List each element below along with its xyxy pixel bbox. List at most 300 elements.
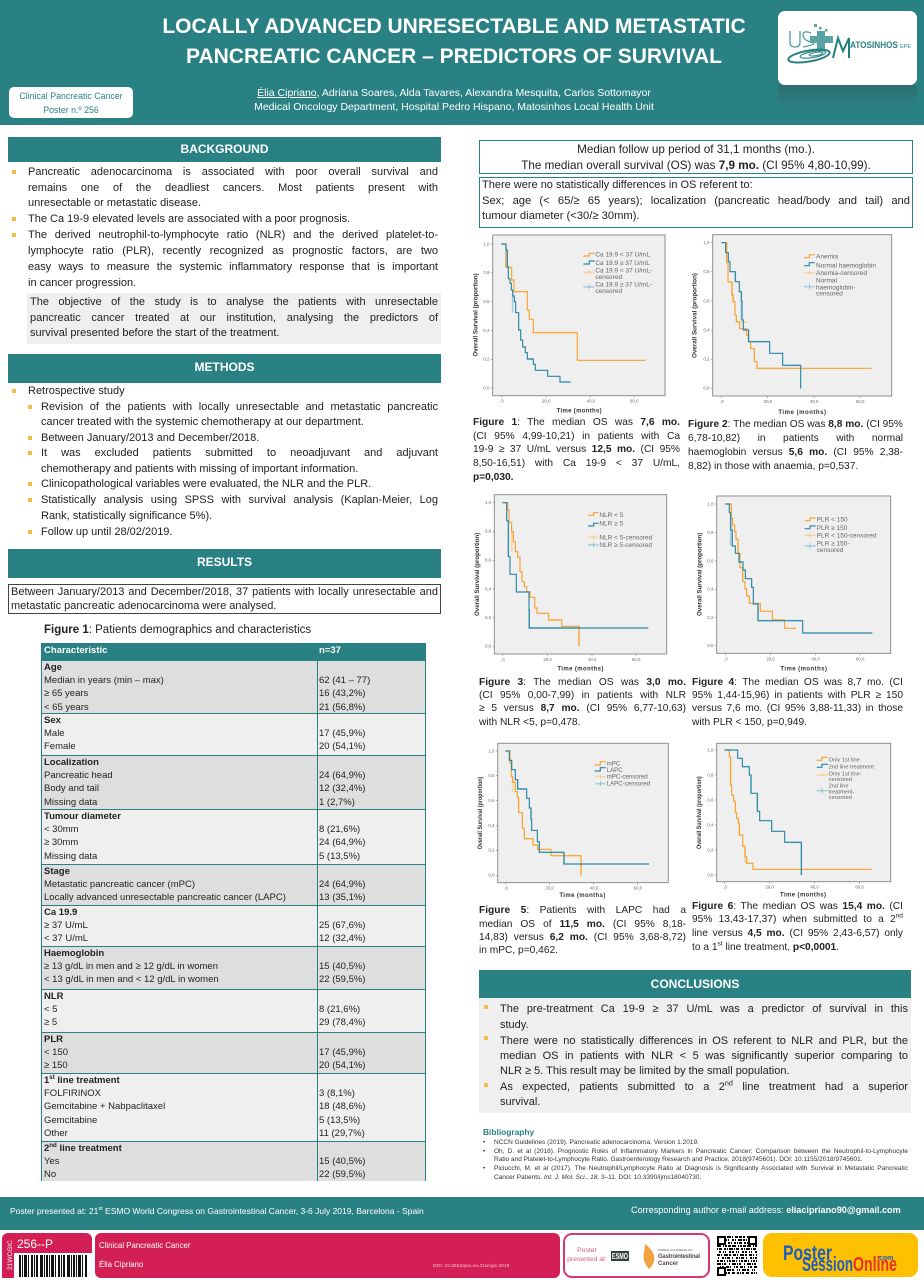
logo: ULS Matosinhos: ATOSINHOS — [850, 40, 898, 51]
axis ticks and labels: 1,0 — [707, 501, 714, 506]
legend: NLR < 5 — [599, 512, 624, 519]
legend: NLR ≥ 5 — [599, 520, 624, 527]
poster info bar: Clinical Pancreatic Cancer — [99, 1241, 190, 1250]
bibliography: Cancer Patients. Int. J. Mol. Sci., 18, 3–11. DOI: 10.3390/ijms18040730. — [494, 1174, 701, 1181]
table: patient characteristics: 24 (64,9%) — [319, 837, 365, 848]
authors and affiliation: Medical Oncology Department, Hospital Pedro Hispano, Matosinhos Local Health Unit — [254, 101, 654, 113]
table: patient characteristics: 5 (13,5%) — [319, 1115, 360, 1126]
legend: Normal — [816, 278, 838, 285]
axis ticks and labels: 20,0 — [765, 884, 774, 889]
axis ticks and labels: Time (months) — [780, 893, 826, 899]
table: patient characteristics: < 13 g/dL in men and < 12 g/dL in women — [44, 974, 219, 985]
heading: methods — [8, 354, 441, 383]
axis ticks and labels: 60,0 — [634, 885, 643, 890]
axis ticks and labels: 1,0 — [488, 748, 495, 753]
panel: background: easy ways to measure the systemic inflammatory response that is important — [28, 260, 438, 272]
poster info bar: DOI: 10.3252/pso.eu.21wcgic.2019 — [433, 1264, 509, 1269]
table: patient characteristics: 21 (56,8%) — [319, 702, 365, 713]
panel: methods: Revision of the patients with locally unresectable and metastatic pancreatic — [41, 400, 438, 412]
axis ticks and labels: 0,4 — [483, 328, 490, 333]
table: patient characteristics: 22 (59,5%) — [319, 974, 365, 985]
table: patient characteristics: 8 (21,6%) — [319, 1004, 360, 1015]
axis ticks and labels: 0,0 — [703, 386, 710, 391]
survival curves — [721, 243, 872, 388]
legend: censored — [829, 777, 852, 783]
table: patient characteristics: 62 (41 – 77) — [319, 675, 370, 686]
axis ticks and labels: Overall Survival (proportion) — [474, 273, 480, 357]
axis ticks and labels: 0,8 — [703, 269, 710, 274]
caption: figure 6: to a 1st line treatment, p<0,0001. — [692, 941, 839, 953]
table: patient characteristics: 12 (32,4%) — [319, 783, 365, 794]
caption: figure 3 — [479, 677, 686, 728]
objective callout: pancreatic cancer treated at our institution, analysing the predictors of — [30, 312, 438, 324]
axis ticks and labels: 0,8 — [483, 270, 490, 275]
results summary: Between January/2013 and December/2018, 37 patients with locally unresectable and — [11, 586, 438, 598]
no differences box: Sex; age (< 65/≥ 65 years); localization (pancreatic head/body and tail) and — [482, 195, 910, 207]
bibliography: • — [483, 1148, 485, 1155]
caption: figure 3: ≥ 5 versus 8,7 mo. (CI 95% 6,77-10,63) — [479, 703, 686, 714]
panel: methods: Statistically analysis using SPSS with survival analysis (Kaplan-Meier, Log — [41, 494, 438, 506]
caption: figure 4: versus 7,6 mo. (CI 95% 3,88-11,33) in those — [692, 703, 903, 714]
legend: LAPC — [607, 767, 623, 774]
table: patient characteristics: Metastatic pancreatic cancer (mPC) — [44, 879, 195, 890]
axis ticks and labels — [474, 241, 639, 414]
legend: 2nd line — [829, 784, 848, 790]
chart: figure 4 PLR — [697, 496, 892, 672]
caption: figure 1: p=0,030. — [473, 472, 514, 483]
legend: Only 1st line- — [829, 771, 862, 777]
legend: mPC — [607, 760, 621, 767]
table: patient characteristics: Other — [44, 1128, 68, 1139]
legend: PLR ≥ 150 — [817, 525, 848, 532]
table: patient characteristics: Median in years (min – max) — [44, 675, 164, 686]
bibliography: Piciucchi, M. et al (2017). The Neutrophil/Lymphocyte Ratio at Diagnosis is Significantly Associated with Survival in Metastatic Pancreatic — [494, 1165, 908, 1172]
panel: conclusions: median OS in patients with NLR < 5 was significantly superior comparing to — [500, 1050, 908, 1062]
results summary: metastatic pancreatic adenocarcinoma were analysed. — [11, 600, 276, 612]
table: patient characteristics: ≥ 37 U/mL — [44, 920, 88, 931]
panel: methods — [8, 354, 441, 538]
logo: ULS Matosinhos: EPE — [900, 44, 911, 50]
heading: methods: METHODS — [194, 360, 254, 374]
table: patient characteristics: 29 (78,4%) — [319, 1017, 365, 1028]
congress note: Poster presented at: 21st ESMO World Congress on Gastrointestinal Cancer, 3-6 July 2019, Barcelona - Spain — [10, 1206, 424, 1216]
legend: Only 1st line — [829, 758, 860, 764]
axis ticks and labels: 20,0 — [764, 399, 773, 404]
legend: censored — [595, 288, 622, 295]
legend: PLR < 150 — [817, 516, 848, 523]
panel: conclusions: NLR ≥ 5. This result may be limited by the small population. — [500, 1064, 790, 1076]
legend: Anemia-censored — [816, 270, 867, 277]
table: patient characteristics: Characteristic — [44, 645, 107, 656]
table: patient characteristics: Locally advanced unresectable pancreatic cancer (LAPC) — [44, 892, 286, 903]
table: patient characteristics: Pancreatic head — [44, 770, 113, 781]
table: patient characteristics: Missing data — [44, 797, 97, 808]
table: patient characteristics: 11 (29,7%) — [319, 1128, 365, 1139]
axis ticks and labels: 1,0 — [483, 241, 490, 246]
axis ticks and labels: 60,0 — [856, 399, 865, 404]
panel: conclusions: study. — [500, 1018, 529, 1030]
table: patient characteristics: Gemcitabine + Nabpaclitaxel — [44, 1101, 165, 1112]
axis ticks and labels: 0,6 — [703, 298, 710, 303]
table: patient characteristics: 1st line treatment — [44, 1074, 120, 1086]
legend: censored — [829, 795, 852, 801]
axis ticks and labels: 40,0 — [590, 885, 599, 890]
legend — [583, 252, 652, 295]
legend: Ca 19.9 < 37 U/mL — [595, 252, 650, 259]
congress logo box: ESMO — [612, 1252, 628, 1261]
poster badge: Poster n.º 256 — [43, 105, 99, 115]
caption: figure 5: median OS of 11,5 mo. (CI 95% 8,18- — [479, 919, 686, 930]
bibliography: Bibliography — [483, 1127, 534, 1137]
axis ticks and labels: 20,0 — [545, 885, 554, 890]
table: patient characteristics: Body and tail — [44, 783, 99, 794]
caption: figure 6 — [692, 901, 903, 953]
axis ticks and labels: 0,2 — [707, 847, 714, 852]
caption: figure 2: 8,82) in those with anaemia, p=0,537. — [688, 461, 858, 472]
caption: figure 2: Figure 2: The median OS was 8,8 mo. (CI 95% — [688, 419, 903, 430]
axis ticks and labels: Overall Survival (proportion) — [693, 273, 699, 358]
axis ticks and labels: Overall Survival (proportion) — [697, 776, 703, 849]
panel: methods: chemotherapy and patients with missing of important information. — [41, 462, 358, 474]
congress logo box — [563, 1233, 710, 1278]
table: patient characteristics: Yes — [44, 1156, 60, 1167]
axis ticks and labels: 20,0 — [543, 657, 552, 662]
caption: figure 4 — [692, 677, 903, 728]
table: patient characteristics: 24 (64,9%) — [319, 770, 365, 781]
caption: figure 3: with NLR <5, p=0,478. — [479, 717, 580, 728]
axis ticks and labels: ,0 — [723, 884, 728, 889]
legend: PLR < 150-censored — [817, 533, 877, 540]
legend — [595, 760, 651, 788]
panel: background — [8, 137, 441, 344]
follow-up summary box — [479, 140, 913, 174]
axis ticks and labels — [697, 747, 864, 899]
legend: NLR < 5-censored — [599, 534, 653, 541]
poster id with barcode: 256--P — [17, 1237, 53, 1251]
table: patient characteristics: Male — [44, 728, 65, 739]
table: patient characteristics: 8 (21,6%) — [319, 824, 360, 835]
axis ticks and labels: Overall Survival (proportion) — [478, 777, 484, 849]
table: patient characteristics: 5 (13,5%) — [319, 851, 360, 862]
legend: 2nd line treatment — [829, 765, 874, 771]
objective callout: The objective of the study is to analyse the patients with unresectable — [30, 296, 438, 308]
congress logo box: Gastrointestinal — [658, 1254, 700, 1260]
axis ticks and labels: 60,0 — [630, 399, 639, 404]
bibliography: NCCN Guidelines (2019). Pancreatic adenocarcinoma. Version 1.2019. — [494, 1139, 699, 1146]
table: patient characteristics: n=37 — [319, 645, 341, 656]
axis ticks and labels: 0,4 — [707, 822, 714, 827]
logo: ULS Matosinhos — [778, 11, 917, 85]
caption: figure 4: 95% 1,44-15,96) in patients with PLR ≥ 150 — [692, 690, 903, 701]
axis ticks and labels: Overall Survival (proportion) — [697, 533, 703, 616]
axis ticks and labels: Time (months) — [557, 408, 602, 414]
panel: methods: Clinicopathological variables were evaluated, the NLR and the PLR. — [41, 478, 371, 490]
table: patient characteristics: Gemcitabine — [44, 1115, 97, 1126]
axis ticks and labels: 0,8 — [707, 530, 714, 535]
table: patient characteristics: 12 (32,4%) — [319, 933, 365, 944]
caption: figure 1: (CI 95% 4,99-10,21) in patients with Ca — [473, 431, 680, 442]
table: patient characteristics: FOLFIRINOX — [44, 1088, 101, 1099]
axis ticks and labels: Time (months) — [778, 410, 826, 416]
PosterSessionOnline logo — [763, 1233, 918, 1277]
heading: results — [8, 549, 441, 578]
axis ticks and labels: 40,0 — [810, 884, 819, 889]
bibliography: • — [483, 1165, 485, 1172]
poster badge: Clinical Pancreatic Cancer — [19, 91, 123, 101]
axis ticks and labels: 0,2 — [485, 615, 492, 620]
table: patient characteristics: < 65 years — [44, 702, 89, 713]
panel: methods: Retrospective study — [28, 384, 125, 396]
caption: figure 5: in mPC, p=0,462. — [479, 945, 558, 956]
table: patient characteristics: 24 (64,9%) — [319, 879, 365, 890]
table: patient characteristics: 15 (40,5%) — [319, 961, 365, 972]
objective callout: survival presented before the start of the treatment. — [30, 326, 279, 338]
table: patient characteristics: 25 (67,6%) — [319, 920, 365, 931]
caption: figure 1: 19-9 ≥ 37 U/mL versus 12,5 mo. (CI 95% — [473, 444, 680, 455]
table: patient characteristics: ≥ 65 years — [44, 688, 88, 699]
corresponding author: Corresponding author e-mail address: eliacipriano90@gmail.com — [631, 1205, 901, 1215]
axis ticks and labels: 0,0 — [707, 643, 714, 648]
table: patient characteristics: Ca 19.9 — [44, 907, 77, 918]
axis ticks and labels: 40,0 — [811, 656, 820, 661]
authors and affiliation — [254, 87, 654, 113]
table: patient characteristics: Sex — [44, 715, 61, 726]
axis ticks and labels: Time (months) — [559, 893, 605, 899]
legend: mPC-censored — [607, 774, 648, 781]
table: patient characteristics: NLR — [44, 991, 64, 1002]
no differences box: tumour diameter (<30/≥ 30mm). — [482, 210, 640, 222]
panel: background: in cancer progression. — [28, 276, 136, 288]
table title: Figure 1: Patients demographics and characteristics — [44, 624, 311, 636]
panel: background: Pancreatic adenocarcinoma is associated with poor overall survival and — [28, 166, 438, 178]
axis ticks and labels: 1,0 — [703, 240, 710, 245]
bibliography: Ratio and Platelet-to-Lymphocyte Ratio. Gastroenterology Research and Practice, 2018(9745601). DOI: 10.1155/2018/9745601. — [494, 1156, 863, 1163]
congress logo box: Poster — [577, 1247, 597, 1254]
table: patient characteristics: 3 (8,1%) — [319, 1088, 355, 1099]
table: patient characteristics: 20 (54,1%) — [319, 1060, 365, 1071]
panel: methods: Follow up until 28/02/2019. — [41, 526, 172, 538]
no differences box — [479, 177, 913, 228]
panel: background: remains one of the deadliest cancers. Most patients present with — [28, 182, 438, 194]
table: patient characteristics: ≥ 13 g/dL in men and ≥ 12 g/dL in women — [44, 961, 218, 972]
legend: Ca 19.9 < 37 U/mL- — [595, 267, 652, 274]
legend: LAPC-censored — [607, 781, 651, 788]
axis ticks and labels: 0,4 — [488, 823, 495, 828]
poster badge — [9, 87, 133, 118]
table: patient characteristics: 13 (35,1%) — [319, 892, 365, 903]
chart: figure 2 haemoglobin — [692, 234, 892, 416]
axis ticks and labels: Time (months) — [780, 666, 827, 672]
legend: Normal haemoglobin — [816, 262, 876, 269]
table: patient characteristics: 17 (45,9%) — [319, 1047, 365, 1058]
survival curves — [505, 751, 649, 875]
bibliography — [483, 1127, 908, 1181]
chart: figure 6 treatment line — [696, 742, 892, 899]
axis ticks and labels: 60,0 — [855, 884, 864, 889]
table: patient characteristics: ≥ 30mm — [44, 837, 78, 848]
congress logo box: presented at: — [567, 1256, 607, 1263]
table: patient characteristics: 18 (48,6%) — [319, 1101, 365, 1112]
caption: figure 3: Figure 3: The median OS was 3,0 mo. — [479, 677, 686, 688]
caption: figure 2 — [688, 419, 903, 472]
caption: figure 2: haemoglobin versus 5,6 mo. (CI 95% 2,38- — [688, 447, 903, 458]
axis ticks and labels: 40,0 — [587, 399, 596, 404]
axis ticks and labels: 0,4 — [703, 328, 710, 333]
table: patient characteristics: 20 (54,1%) — [319, 741, 365, 752]
legend: haemoglobin- — [816, 284, 855, 291]
caption: figure 6: 95% 13,43-17,37) when submitted to a 2nd — [692, 913, 903, 925]
PosterSessionOnline logo: .com — [877, 1255, 893, 1262]
header band — [0, 0, 924, 125]
panel: conclusions: There were no statistically differences in OS referent to NLR and PLR, but the — [500, 1034, 908, 1046]
table: patient characteristics: < 30mm — [44, 824, 79, 835]
axis ticks and labels: 0,0 — [707, 872, 714, 877]
table: patient characteristics: Stage — [44, 866, 70, 877]
title — [162, 15, 746, 68]
survival curves — [725, 504, 872, 633]
axis ticks and labels: 20,0 — [542, 399, 551, 404]
axis ticks and labels: 0,8 — [707, 772, 714, 777]
axis ticks and labels: 0,6 — [488, 798, 495, 803]
table: patient characteristics: Haemoglobin — [44, 948, 104, 959]
table: patient characteristics: < 150 — [44, 1047, 68, 1058]
QR code — [717, 1236, 757, 1276]
axis ticks and labels — [693, 240, 865, 416]
PosterSessionOnline logo: Session — [802, 1254, 853, 1276]
survival curves — [725, 750, 872, 875]
bibliography: • — [483, 1139, 485, 1146]
caption: figure 5 — [479, 905, 686, 956]
table: patient characteristics: PLR — [44, 1034, 63, 1045]
caption: figure 6: Figure 6: The median OS was 15,4 mo. (CI — [692, 901, 903, 912]
axis ticks and labels: 40,0 — [588, 657, 597, 662]
authors and affiliation: Élia Cipriano, Adriana Soares, Alda Tavares, Alexandra Mesquita, Carlos Sottomayor — [257, 87, 651, 99]
table: patient characteristics — [41, 643, 426, 1181]
axis ticks and labels: 40,0 — [810, 399, 819, 404]
axis ticks and labels: ,0 — [500, 399, 504, 404]
results summary — [8, 584, 441, 614]
caption: figure 3: (CI 95% 0,00-7,99) in patients with NLR — [479, 690, 686, 701]
axis ticks and labels: ,0 — [504, 885, 509, 890]
legend — [588, 512, 653, 549]
table: patient characteristics: Tumour diameter — [44, 811, 121, 822]
table: patient characteristics: Female — [44, 741, 76, 752]
caption: figure 1: 8,50-16,51) with Ca 19-9 < 37 U/mL, — [473, 458, 680, 469]
table: patient characteristics: Localization — [44, 757, 99, 768]
axis ticks and labels: 0,0 — [488, 873, 495, 878]
axis ticks and labels — [475, 500, 641, 673]
panel: background: lymphocyte ratio (PLR), recently recognized as prognostic factors, are two — [28, 244, 438, 256]
caption: figure 1: Figure 1: The median OS was 7,6 mo. — [473, 417, 680, 428]
congress logo box: Cancer — [658, 1261, 679, 1267]
caption: figure 5: Figure 5: Patients with LAPC had a — [479, 905, 686, 916]
legend: Ca 19.9 ≥ 37 U/mL- — [595, 281, 652, 288]
caption: figure 4: with PLR < 150, p=0,949. — [692, 717, 807, 728]
table: patient characteristics: 2nd line treatment — [44, 1142, 122, 1154]
axis ticks and labels: 0,6 — [485, 558, 492, 563]
panel: conclusions — [479, 970, 911, 1113]
axis ticks and labels: ,0 — [720, 399, 724, 404]
table: patient characteristics: 22 (59,5%) — [319, 1169, 365, 1180]
axis ticks and labels: ,0 — [501, 657, 505, 662]
heading: results: RESULTS — [197, 555, 252, 569]
no differences box: There were no statistically differences in OS referent to: — [482, 179, 753, 191]
axis ticks and labels: 0,4 — [707, 587, 714, 592]
table: patient characteristics: < 5 — [44, 1004, 57, 1015]
panel: background: The Ca 19-9 elevated levels are associated with a poor prognosis. — [28, 212, 350, 224]
legend: censored — [595, 274, 622, 281]
axis ticks and labels: 0,0 — [485, 644, 492, 649]
panel: methods: cancer treated with the systemic chemotherapy at our department. — [41, 416, 364, 428]
legend — [805, 516, 877, 554]
panel: conclusions: As expected, patients submitted to a 2nd line treatment had a superior — [500, 1079, 908, 1092]
axis ticks and labels: 20,0 — [766, 656, 775, 661]
axis ticks and labels: 0,0 — [483, 385, 490, 390]
panel: background: unresectable or metastatic disease. — [28, 196, 201, 208]
axis ticks and labels: 0,8 — [488, 773, 495, 778]
caption: figure 1 — [473, 417, 680, 483]
axis ticks and labels: ,0 — [724, 656, 728, 661]
axis ticks and labels: 0,2 — [483, 357, 490, 362]
table: patient characteristics: Age — [44, 662, 62, 673]
axis ticks and labels: 0,4 — [485, 586, 492, 591]
table: patient characteristics: ≥ 5 — [44, 1017, 57, 1028]
axis ticks and labels: Time (months) — [557, 667, 603, 673]
poster info bar: Élia Cipriano — [99, 1260, 143, 1269]
panel: background: The derived neutrophil-to-lymphocyte ratio (NLR) and the derived platelet-to- — [28, 228, 438, 240]
caption: figure 4: Figure 4: The median OS was 8,7 mo. (CI — [692, 677, 903, 688]
legend — [817, 757, 874, 801]
table: patient characteristics: 15 (40,5%) — [319, 1156, 365, 1167]
title: PANCREATIC CANCER – PREDICTORS OF SURVIVAL — [186, 45, 722, 68]
legend: treatment- — [829, 789, 855, 795]
axis ticks and labels: 1,0 — [485, 500, 492, 505]
survival curves — [502, 503, 648, 646]
caption: figure 6: line versus 4,5 mo. (CI 95% 2,43-6,57) only — [692, 928, 903, 939]
PosterSessionOnline logo: Poster — [783, 1242, 832, 1265]
table: patient characteristics: ≥ 150 — [44, 1060, 68, 1071]
axis ticks and labels — [478, 748, 643, 899]
congress logo box: WORLD CONGRESS ON — [658, 1248, 693, 1252]
table: patient characteristics: 17 (45,9%) — [319, 728, 365, 739]
axis ticks and labels: 0,2 — [707, 615, 714, 620]
footer band — [0, 1197, 924, 1230]
panel: conclusions: survival. — [500, 1096, 540, 1108]
survival curves — [501, 244, 646, 382]
axis ticks and labels: 0,6 — [483, 299, 490, 304]
follow-up summary box: The median overall survival (OS) was 7,9 mo. (CI 95% 4,80-10,99). — [521, 159, 871, 172]
follow-up summary box: Median follow up period of 31,1 months (mo.). — [577, 143, 815, 156]
legend: PLR ≥ 150- — [817, 541, 850, 548]
panel: conclusions: The pre-treatment Ca 19-9 ≥ 37 U/mL was a predictor of survival in this — [500, 1002, 908, 1014]
table: patient characteristics: 1 (2,7%) — [319, 797, 355, 808]
caption: figure 2: 6,78-10,82) in patients with normal — [688, 433, 903, 444]
chart: figure 3 NLR — [474, 494, 668, 673]
heading: conclusions — [479, 970, 911, 998]
axis ticks and labels — [697, 501, 865, 672]
panel: methods: Rank, statistically significance 5%). — [41, 510, 212, 522]
legend: censored — [816, 291, 843, 298]
legend: Anemia — [816, 254, 838, 261]
poster info bar — [95, 1233, 560, 1278]
table: patient characteristics: Missing data — [44, 851, 97, 862]
axis ticks and labels: 0,6 — [707, 558, 714, 563]
heading: background — [8, 137, 441, 162]
table: patient characteristics: No — [44, 1169, 56, 1180]
caption: figure 5: 14,83) versus 6,2 mo. (CI 95% 3,68-8,72) — [479, 932, 686, 943]
poster id with barcode — [2, 1233, 92, 1278]
PosterSessionOnline logo: Online — [853, 1254, 897, 1276]
